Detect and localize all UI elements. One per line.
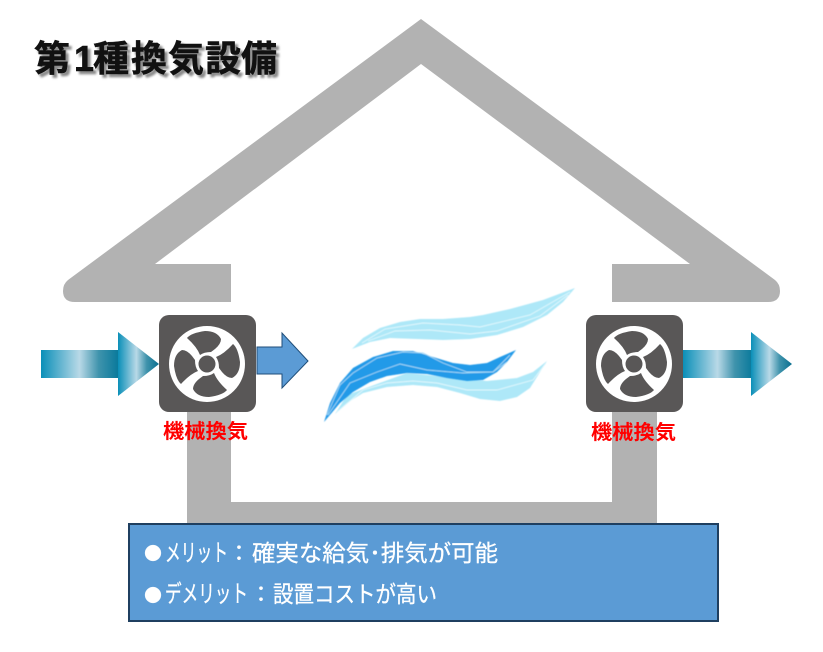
wind: dark stream <box>324 350 516 422</box>
demerit text <box>145 581 437 608</box>
title: 第1種換気設備 <box>34 38 277 79</box>
arrow: exhaust <box>683 332 792 396</box>
demerit text: 設置コストが高い <box>273 581 437 607</box>
icon: exhaust fan <box>586 315 683 412</box>
title: 第1種換気設備 <box>37 41 280 82</box>
panel: merits and demerits <box>129 524 718 621</box>
wind: top light stream <box>352 288 575 349</box>
house roof <box>63 19 780 302</box>
icon: intake fan <box>159 315 256 412</box>
demerit text: ： <box>250 582 272 607</box>
arrow: intake <box>41 332 159 396</box>
demerit text: デメリット <box>165 581 248 608</box>
merit text: ： <box>228 541 250 566</box>
merit text <box>145 540 498 567</box>
merit text: 確実な給気･排気が可能 <box>252 540 498 566</box>
wind: bottom light stream <box>335 361 547 414</box>
merit text: メリット <box>165 540 228 567</box>
label: right mechanical ventilation: 機械換気 <box>591 421 676 444</box>
house walls <box>187 400 657 530</box>
arrow: blue supply <box>257 333 308 388</box>
label: left mechanical ventilation: 機械換気 <box>163 420 248 443</box>
